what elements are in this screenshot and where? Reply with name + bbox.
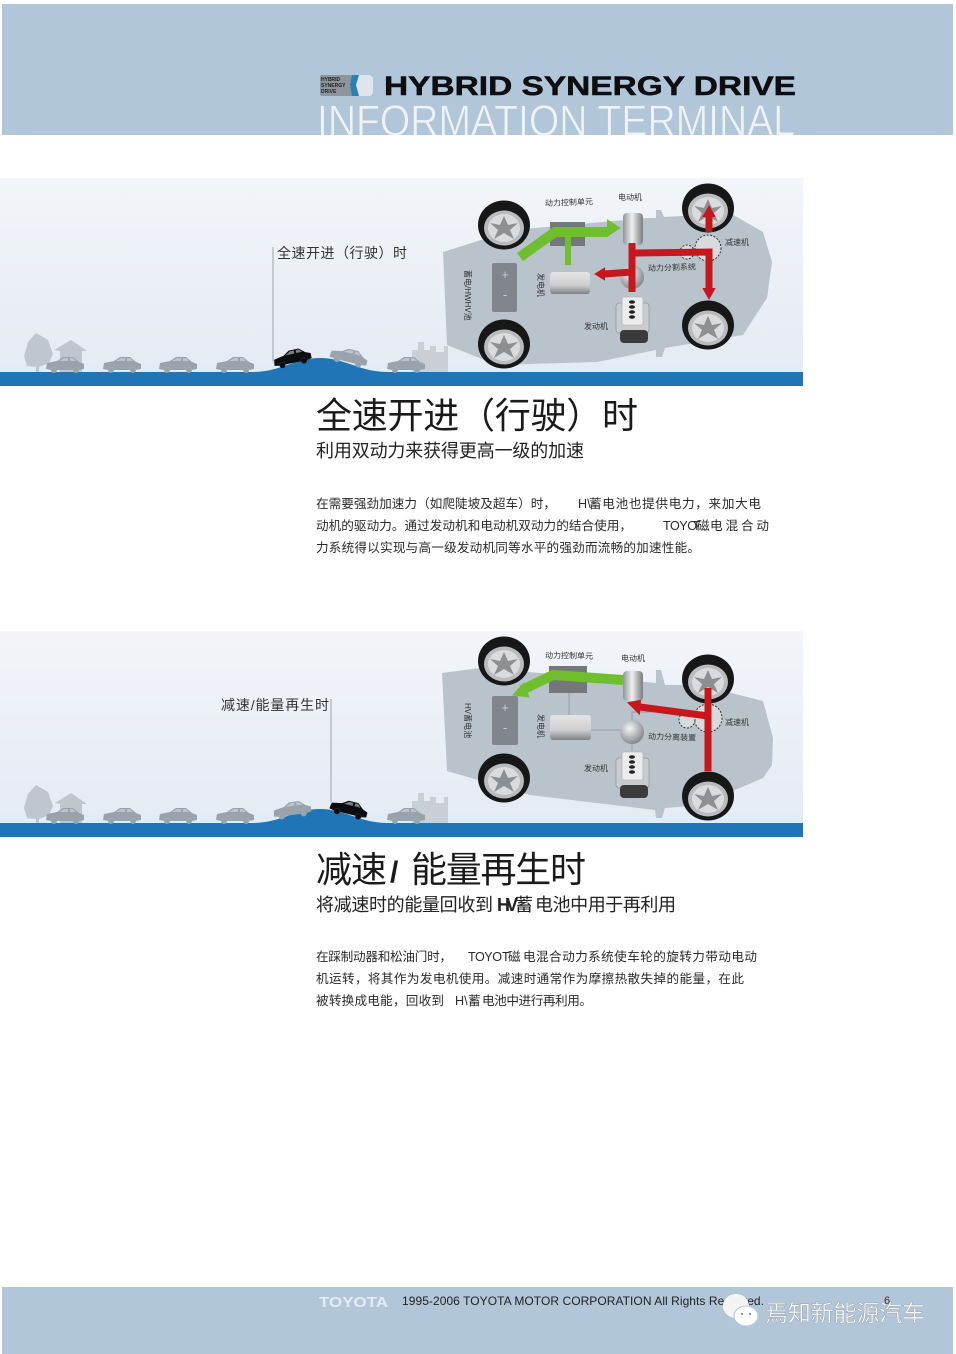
body text: deceleration: 蓄 [468,994,481,1008]
section title: deceleration: 减速 [316,849,387,890]
section subtitle: deceleration: 将减速时的能量回收到 [316,895,493,915]
component labels: 发电机 [536,714,546,738]
queue of cars [46,799,425,824]
component labels: 电动机 [618,192,642,202]
header band [2,4,953,146]
section subtitle: deceleration: HV [497,895,518,915]
logo badge: HYBRID [321,77,341,83]
motor [623,671,643,701]
scene leader line [330,699,332,802]
component labels [463,650,749,773]
battery: + [501,700,509,715]
roadside silhouettes [24,333,448,382]
motor [623,213,643,245]
panel: deceleration scene [0,631,803,837]
connector lines [569,693,690,751]
section title: deceleration: / [390,856,399,889]
body text: full speed: 蓄电池也提供电力，来加大电 [589,496,761,511]
active car [328,797,369,821]
car chassis diagram [442,636,773,820]
green electric flow arrows [520,221,619,265]
body text: deceleration: 电混合动力系统使车轮的旋转力带动电动 [523,949,757,964]
body text: deceleration: H\ [455,994,468,1008]
power split device [620,720,644,744]
component labels: 发动机 [584,763,608,773]
section subtitle: full speed: 利用双动力来获得更高一级的加速 [316,441,584,461]
power control unit [549,666,587,693]
body text: full speed: 在需要强劲加速力（如爬陡坡及超车）时， [316,496,556,511]
component labels: 动力分割系统 [648,261,696,273]
reduction gear [680,235,721,261]
generator [550,272,590,294]
toyota wordmark: TOYOTA [319,1294,388,1311]
reduction gear [679,704,722,732]
section subtitle: deceleration: 电池中用于再利用 [535,895,676,915]
logo badge: SYNERGY [321,83,346,89]
power control unit [550,222,585,246]
watermark text: 焉知新能源汽车 [765,1300,925,1326]
engine [616,752,649,798]
panel: full speed scene [0,178,803,386]
footer band [2,1287,953,1354]
body text: full speed: 电混合动 [710,519,769,533]
battery: + [501,267,509,282]
component labels: 蓄电/HWHV池 [463,270,473,321]
body text: deceleration [316,949,757,1008]
body text: deceleration: 机运转，将其作为发电机使用。减速时通常作为摩擦热散失掉的能量，在此 [316,971,744,986]
queue of cars [46,345,425,373]
body text: full speed: T [693,519,701,533]
component labels: 动力控制单元 [545,196,593,208]
page number: 6 [884,1295,890,1307]
component labels: 电动机 [621,653,645,663]
body text: full speed: 力系统得以实现与高一级发动机同等水平的强劲而流畅的加速性能。 [316,540,700,555]
section subtitle: deceleration [316,895,676,915]
body text: full speed [316,496,769,555]
component labels: HV蓄电池 [463,703,473,738]
copyright: 1995-2006 TOYOTA MOTOR CORPORATION All Rights Reserved. [402,1294,764,1308]
scene leader line [272,247,274,362]
active car [272,346,312,370]
body text: deceleration: 磁 [508,950,521,964]
logo badge: DRIVE [321,89,337,95]
component labels: 发电机 [536,273,546,297]
red mechanical flow arrows [596,207,714,298]
body text: full speed: H\ [578,497,591,511]
component labels: 减速机 [725,717,749,727]
engine [616,297,649,343]
green regeneration arrow [513,675,623,697]
road with hill [0,809,803,837]
body text: full speed: 动机的驱动力。通过发动机和电动机双动力的结合使用， [316,518,632,533]
logo badge [320,75,373,96]
body text: deceleration: T [502,950,510,964]
body text: full speed: 磁 [697,519,710,533]
component labels [463,192,749,331]
road with hill [0,358,803,386]
car chassis diagram [443,184,772,368]
body text: deceleration: 电池中进行再利用。 [482,994,592,1008]
header title: HYBRID SYNERGY DRIVE [384,71,796,101]
battery [492,696,518,745]
scene label: 减速/能量再生时 [221,697,329,713]
scene label: 全速开进（行驶）时 [277,245,407,261]
battery: - [503,720,507,735]
component labels: 发动机 [584,321,608,331]
component labels: 动力控制单元 [545,650,593,661]
body text: deceleration: 在踩制动器和松油门时， [316,950,452,964]
generator [550,715,591,740]
component labels: 减速机 [725,237,749,247]
section title: deceleration [316,849,586,890]
power split device [620,265,644,289]
roadside silhouettes [24,785,448,834]
section title: full speed: 全速开进（行驶）时 [316,395,638,436]
component labels: 动力分离装置 [648,731,696,743]
icon: wechat watermark [723,1294,758,1326]
section title: deceleration: 能量再生时 [411,849,586,890]
battery [492,263,517,312]
body text: deceleration: TOYO [468,950,502,964]
battery: - [503,287,507,302]
red regeneration arrows [629,688,708,771]
section subtitle: deceleration: 蓄 [515,895,533,915]
body text: full speed: TOYO [663,519,697,533]
body text: deceleration: 被转换成电能，回收到 [316,994,444,1008]
